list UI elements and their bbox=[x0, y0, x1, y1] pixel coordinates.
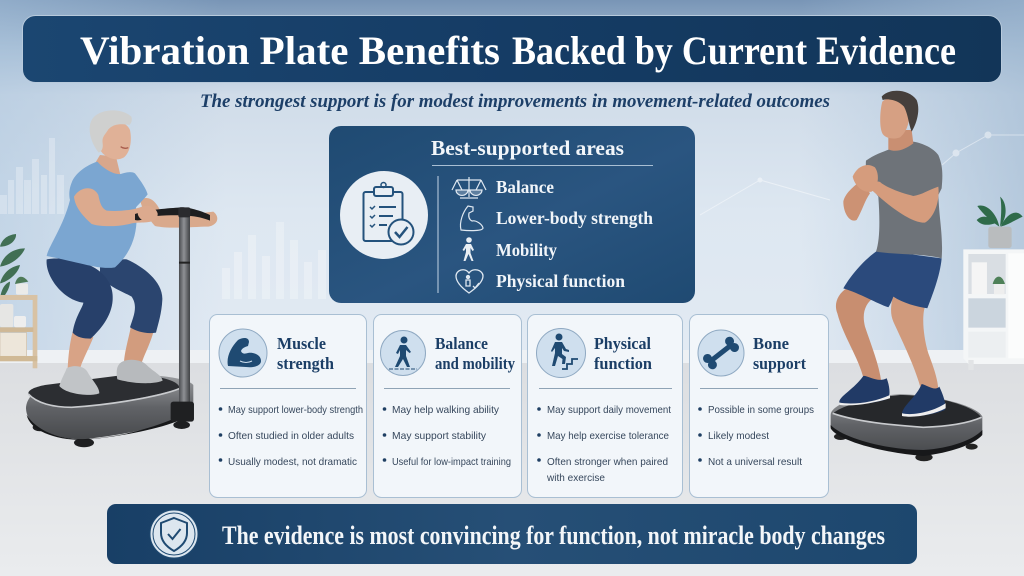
hair bbox=[882, 91, 918, 132]
shoes bbox=[839, 376, 890, 404]
benefit list bbox=[383, 404, 511, 468]
header banner bbox=[22, 16, 1002, 82]
card: balance and mobility bbox=[374, 314, 522, 498]
list item: balance: Balance bbox=[496, 177, 554, 197]
list item: physical function: Physical function bbox=[496, 271, 625, 291]
card: muscle strength bbox=[210, 314, 366, 498]
panel: best-supported areas bbox=[329, 126, 695, 303]
face bbox=[880, 98, 910, 139]
near leg legging bbox=[47, 258, 113, 339]
front arm bbox=[872, 182, 939, 223]
shirt bbox=[47, 162, 148, 268]
figure: man squatting on vibration plate bbox=[831, 91, 982, 461]
heading: Balance bbox=[435, 334, 488, 353]
card: physical function bbox=[528, 314, 682, 498]
icon: person climbing stairs bbox=[536, 328, 586, 378]
benefit list: May support stability bbox=[392, 430, 487, 442]
benefit list: Often studied in older adults bbox=[228, 430, 354, 442]
vibration plate bbox=[26, 375, 193, 447]
icon: walking person bbox=[380, 330, 426, 376]
benefit list bbox=[698, 404, 814, 468]
benefit list: Useful for low-impact training bbox=[392, 456, 511, 468]
benefit list: May support lower-body strength bbox=[228, 404, 363, 416]
icon: bone bbox=[698, 330, 744, 376]
baseboard bbox=[0, 350, 1024, 363]
floor bbox=[0, 363, 1024, 576]
heading: Best-supported areas bbox=[431, 136, 624, 160]
far calf bbox=[124, 323, 154, 363]
icon: flexed arm bbox=[219, 329, 267, 377]
legs bbox=[836, 288, 882, 385]
icon: heart with figure bbox=[456, 270, 483, 293]
heading: Physical bbox=[594, 334, 651, 353]
icon: shield with check bbox=[150, 510, 198, 558]
benefit list: Possible in some groups bbox=[708, 404, 814, 416]
neck bbox=[95, 155, 121, 179]
card: physical function: function bbox=[594, 354, 653, 373]
hand bbox=[138, 206, 158, 221]
hair bbox=[90, 110, 132, 153]
benefit list: with exercise bbox=[546, 472, 605, 484]
benefit list: Usually modest, not dramatic bbox=[228, 456, 357, 468]
near arm bbox=[74, 188, 157, 226]
icon: walker bbox=[462, 237, 474, 261]
right furniture: plant and shelf bbox=[963, 197, 1024, 370]
background line chart right bbox=[700, 132, 1024, 215]
title bbox=[80, 28, 956, 73]
card: bone support: support bbox=[753, 354, 806, 373]
background wall bbox=[0, 0, 1024, 352]
vibration plate bbox=[831, 394, 982, 461]
benefit list: May help exercise tolerance bbox=[547, 430, 669, 442]
title: Backed by Current Evidence bbox=[512, 28, 956, 73]
shirt bbox=[866, 142, 942, 258]
card: muscle strength: strength bbox=[277, 354, 335, 373]
benefit list: Likely modest bbox=[708, 430, 769, 442]
heading: Bone bbox=[753, 334, 789, 353]
benefit list: Often stronger when paired bbox=[547, 456, 668, 468]
list item: lower-body strength: Lower-body strength bbox=[496, 208, 653, 228]
card: bone support bbox=[690, 314, 828, 498]
figure: older woman squatting on vibration plate with handle bbox=[26, 110, 217, 447]
card: balance and mobility: and mobility bbox=[435, 354, 515, 373]
icon: clipboard with check bbox=[340, 171, 428, 259]
bottom callout bar bbox=[107, 504, 917, 564]
benefit list: Not a universal result bbox=[708, 456, 802, 468]
far leg legging bbox=[100, 259, 162, 333]
shoes bbox=[117, 360, 163, 383]
shorts bbox=[843, 250, 942, 308]
benefit list: May help walking ability bbox=[392, 404, 500, 416]
far arm bbox=[140, 198, 217, 228]
callout text: The evidence is most convincing for function, not miracle body changes bbox=[222, 521, 885, 550]
neck bbox=[888, 130, 913, 151]
benefit list bbox=[537, 404, 671, 484]
icon: arm bbox=[460, 206, 483, 231]
handle pole and bar bbox=[135, 207, 210, 422]
background bar chart left bbox=[0, 138, 326, 299]
near calf bbox=[68, 332, 93, 369]
heading: Muscle bbox=[277, 334, 326, 353]
face bbox=[97, 121, 131, 159]
clasped hands bbox=[853, 165, 878, 192]
icon: scales bbox=[452, 177, 486, 198]
subtitle: The strongest support is for modest improvements in movement-related outcomes bbox=[200, 91, 830, 112]
benefit list bbox=[219, 404, 363, 468]
benefit list: May support daily movement bbox=[547, 404, 671, 416]
left furniture: plant and shelf bbox=[0, 234, 37, 368]
title: Vibration Plate Benefits bbox=[80, 28, 500, 73]
back arm bbox=[843, 180, 870, 221]
list item: mobility: Mobility bbox=[496, 240, 557, 260]
